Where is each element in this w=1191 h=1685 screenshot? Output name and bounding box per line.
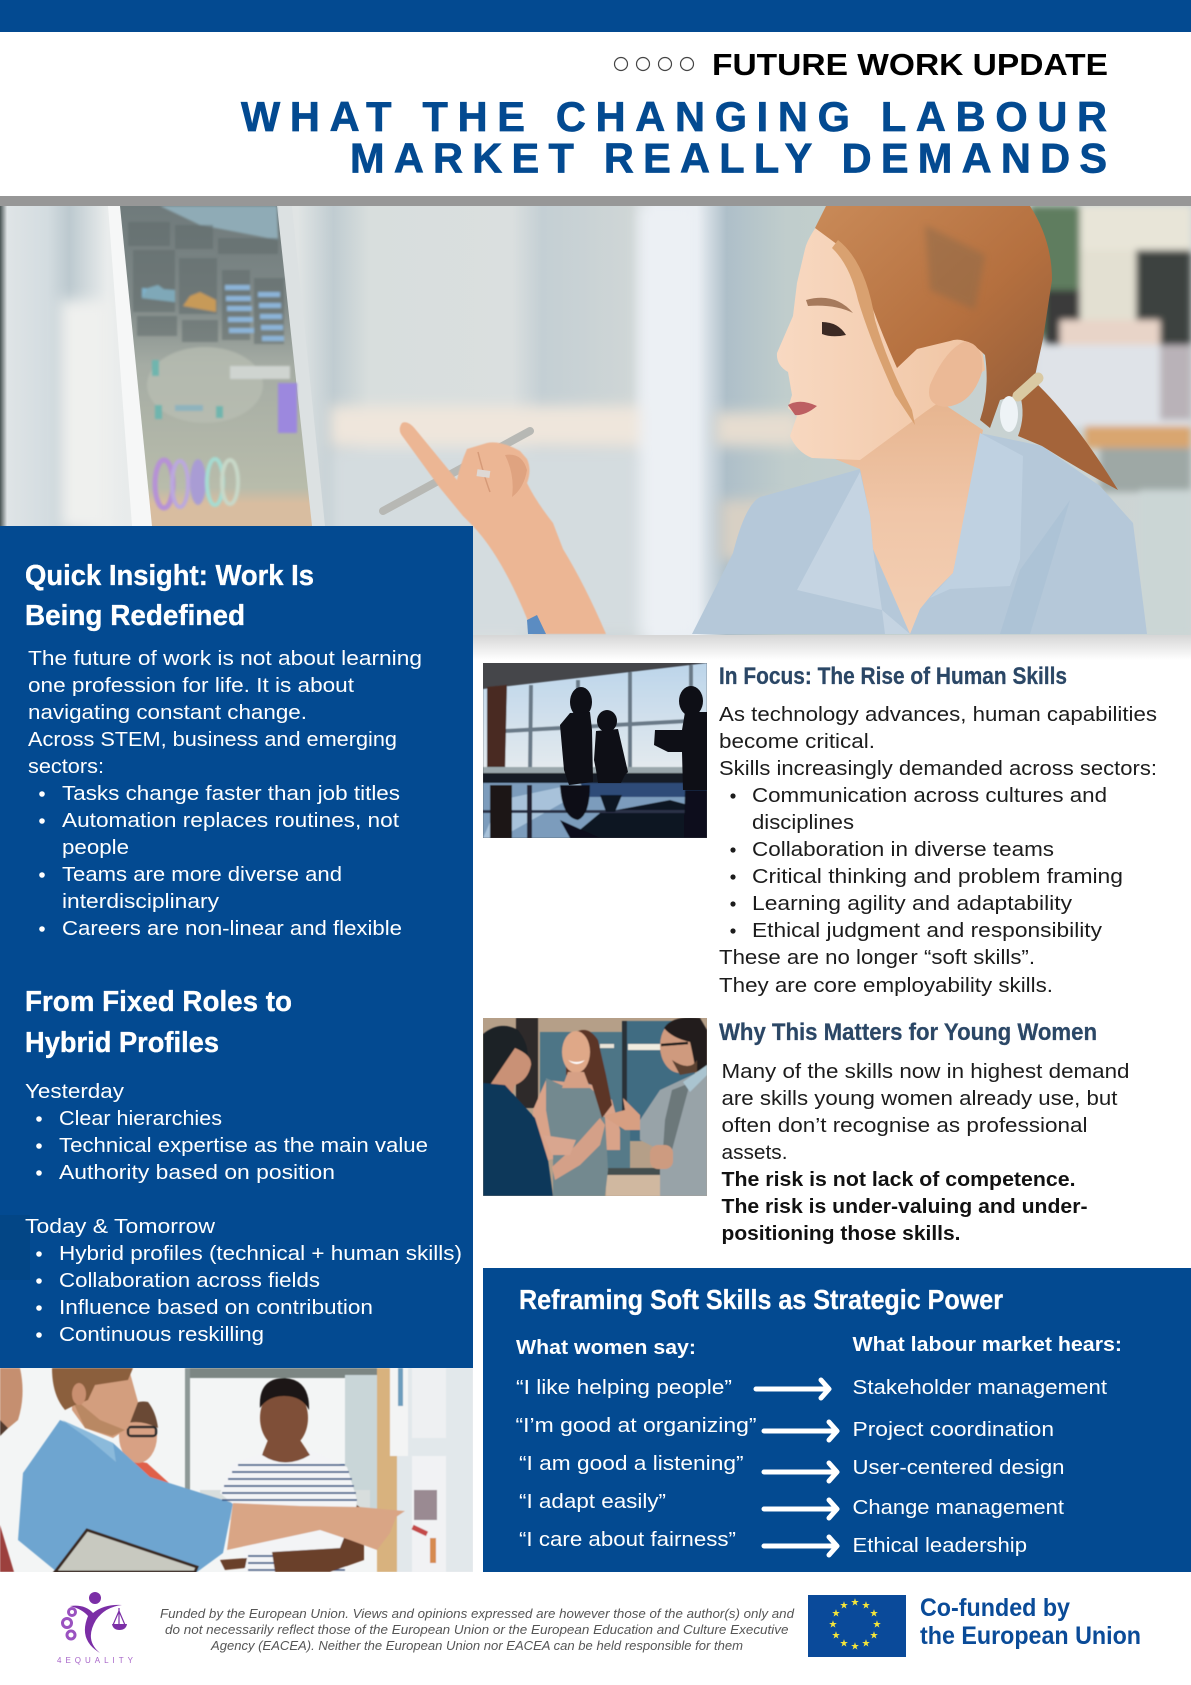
face: [777, 206, 985, 460]
list: yesterday: Authority based on position: [59, 1161, 335, 1184]
list: yesterday: [25, 1080, 428, 1184]
row: organizing: [516, 1414, 1054, 1441]
monitor: [108, 206, 152, 526]
grey divider: [0, 196, 1191, 206]
text block: in focus body: Ethical judgment and responsibility: [752, 919, 1103, 942]
row: organizing: “I’m good at organizing”: [516, 1414, 757, 1437]
pen: [383, 431, 530, 511]
list: yesterday: Yesterday: [25, 1080, 125, 1103]
row: helping people: [516, 1376, 1107, 1399]
row: fairness: Ethical leadership: [852, 1534, 1027, 1557]
list: work changes: Tasks change faster than job titles: [62, 782, 400, 805]
hand and arm: [400, 422, 606, 634]
text block: in focus body: They are core employability skills.: [719, 974, 1053, 997]
row: listening: [519, 1452, 1064, 1481]
text block: in focus body: These are no longer “soft skills”.: [719, 946, 1035, 969]
text block: in focus body: Skills increasingly demanded across sectors:: [719, 757, 1157, 780]
list: today and tomorrow: [25, 1215, 462, 1346]
tablet: [55, 1530, 197, 1572]
row: adapt: “I adapt easily”: [519, 1490, 666, 1513]
text block: quick insight body: navigating constant change.: [28, 701, 307, 724]
row: listening: “I am good a listening”: [519, 1452, 744, 1475]
list: today and tomorrow: Continuous reskilling: [59, 1323, 264, 1346]
text block: in focus body: As technology advances, human capabilities: [719, 703, 1157, 726]
text block: why this matters body: are skills young women already use, but: [722, 1087, 1118, 1110]
row: fairness: [519, 1528, 1027, 1557]
icon: EU flag: ★: [829, 1620, 838, 1630]
text block: quick insight body: [28, 647, 422, 778]
text block: why this matters body: The risk is not lack of competence.: [722, 1168, 1076, 1191]
smiling woman: [533, 1080, 620, 1160]
text block: funding disclaimer: [160, 1607, 795, 1653]
heading: why this matters: Why This Matters for Young Women: [719, 1019, 1097, 1046]
list: work changes: [39, 782, 402, 940]
scrunchie: [1018, 378, 1038, 396]
row: helping people: Stakeholder management: [852, 1376, 1107, 1399]
text block: why this matters body: Many of the skills now in highest demand: [722, 1060, 1130, 1083]
list: yesterday: Clear hierarchies: [59, 1107, 222, 1130]
text block: quick insight body: one profession for life. It is about: [28, 674, 354, 697]
list: work changes: people: [62, 836, 129, 859]
list: today and tomorrow: Hybrid profiles (technical + human skills): [59, 1242, 462, 1265]
text block: in focus body: [719, 703, 1157, 997]
icon: EU flag: [808, 1595, 906, 1657]
column heading: what labour market hears: What labour market hears:: [852, 1333, 1122, 1356]
sleeve cuff: [527, 615, 546, 634]
row: adapt: [519, 1490, 1064, 1519]
list: today and tomorrow: Collaboration across fields: [59, 1269, 320, 1292]
row: fairness: “I care about fairness”: [519, 1528, 736, 1551]
heading: hybrid profiles: From Fixed Roles to: [25, 986, 292, 1018]
photo: team at a whiteboard: [0, 1368, 473, 1572]
list: work changes: Careers are non-linear and flexible: [62, 917, 402, 940]
list: work changes: interdisciplinary: [62, 890, 220, 913]
woman left back view: [483, 1026, 528, 1087]
second man: [220, 1450, 357, 1572]
row: helping people: “I like helping people”: [516, 1376, 732, 1399]
heading: reframing: Reframing Soft Skills as Strategic Power: [519, 1284, 1003, 1315]
text block: in focus body: become critical.: [719, 730, 875, 753]
icon: EU flag: ★: [832, 1608, 841, 1620]
collar right: [930, 433, 1023, 598]
icon: EU flag: ★: [870, 1608, 879, 1620]
eye, brow, lips: [806, 298, 853, 313]
text block: why this matters body: [722, 1060, 1130, 1245]
heading: quick insight: [25, 560, 314, 632]
text block: quick insight body: sectors:: [28, 755, 104, 778]
list: today and tomorrow: Influence based on contribution: [59, 1296, 373, 1319]
top bar: [0, 0, 1191, 32]
woman: [134, 1462, 169, 1484]
foreground person left: [0, 1368, 23, 1435]
text block: in focus body: disciplines: [752, 811, 854, 834]
column heading: what women say: What women say:: [516, 1336, 696, 1359]
text block: why this matters body: often don’t recognise as professional: [722, 1114, 1088, 1137]
icon: EU flag: ★: [840, 1638, 849, 1650]
text block: quick insight body: Across STEM, business and emerging: [28, 728, 397, 751]
text: co-funded by the European Union: the European Union: [920, 1622, 1141, 1650]
heading: hybrid profiles: Hybrid Profiles: [25, 1027, 219, 1059]
title: [241, 93, 1107, 182]
text block: in focus body: Learning agility and adaptability: [752, 892, 1073, 915]
heading: in focus: In Focus: The Rise of Human Skills: [719, 663, 1067, 690]
silhouettes: [560, 686, 707, 790]
list: today and tomorrow: Today & Tomorrow: [25, 1215, 215, 1238]
shade below hero: [473, 635, 1191, 660]
list: work changes: Automation replaces routines, not: [62, 809, 399, 832]
pointing arm: [227, 1503, 405, 1550]
man pointing: [18, 1420, 233, 1572]
logo: 4equality: 4EQUALITY: [57, 1656, 134, 1665]
neck: [835, 404, 983, 634]
list: work changes: Teams are more diverse and: [62, 863, 342, 886]
hair: [815, 206, 1052, 428]
hero photo: woman looking at dashboard monitor: [0, 206, 1191, 635]
heading: quick insight: Quick Insight: Work Is: [25, 560, 314, 592]
text block: funding disclaimer: do not necessarily reflect those of the European Union or the European Education and Culture Executive: [165, 1623, 789, 1637]
text: co-funded by the European Union: [920, 1594, 1141, 1650]
row: listening: User-centered design: [852, 1456, 1064, 1479]
text block: in focus body: Critical thinking and problem framing: [752, 865, 1123, 888]
text block: quick insight body: The future of work is not about learning: [28, 647, 422, 670]
icon: EU flag: ★: [862, 1638, 871, 1650]
text block: in focus body: Collaboration in diverse teams: [752, 838, 1054, 861]
row: organizing: Project coordination: [852, 1418, 1054, 1441]
shirt: [692, 433, 1147, 634]
ponytail: [1018, 382, 1118, 490]
collar left: [797, 472, 882, 610]
icon: EU flag: ★: [862, 1600, 871, 1612]
text block: why this matters body: positioning those skills.: [722, 1222, 960, 1245]
row: adapt: Change management: [852, 1496, 1064, 1519]
panel: reframing soft skills: [483, 1268, 1191, 1572]
text block: in focus body: Communication across cultures and: [752, 784, 1107, 807]
icon: EU flag: ★: [873, 1620, 882, 1630]
logo: 4equality: [57, 1592, 134, 1665]
icon: EU flag: ★: [870, 1630, 879, 1642]
icon: EU flag: ★: [832, 1630, 841, 1642]
text block: why this matters body: The risk is under-valuing and under-: [722, 1195, 1088, 1218]
panel: left column: [0, 526, 473, 1368]
heading: quick insight: Being Redefined: [25, 600, 245, 632]
ear: [929, 341, 982, 407]
heading: hybrid profiles: [25, 986, 292, 1059]
text: co-funded by the European Union: Co-funded by: [920, 1594, 1070, 1622]
man right: [640, 1068, 707, 1196]
text block: why this matters body: assets.: [722, 1141, 788, 1164]
icon: EU flag: ★: [851, 1598, 860, 1608]
title: WHAT THE CHANGING LABOUR: [241, 93, 1107, 140]
photo: silhouettes in a meeting room: [483, 663, 707, 838]
text block: funding disclaimer: Agency (EACEA). Neither the European Union nor EACEA can be held responsible for them: [210, 1639, 743, 1653]
header: kicker with dots: FUTURE WORK UPDATE: [712, 47, 1108, 82]
icon: EU flag: ★: [851, 1642, 860, 1652]
list: yesterday: Technical expertise as the main value: [59, 1134, 428, 1157]
icon: EU flag: ★: [840, 1600, 849, 1612]
photo: three colleagues talking: [483, 1017, 707, 1196]
text block: funding disclaimer: Funded by the European Union. Views and opinions expressed are however those of the author(s) only and: [160, 1607, 795, 1621]
title: MARKET REALLY DEMANDS: [350, 134, 1107, 182]
background objects on the right: [1030, 206, 1191, 495]
